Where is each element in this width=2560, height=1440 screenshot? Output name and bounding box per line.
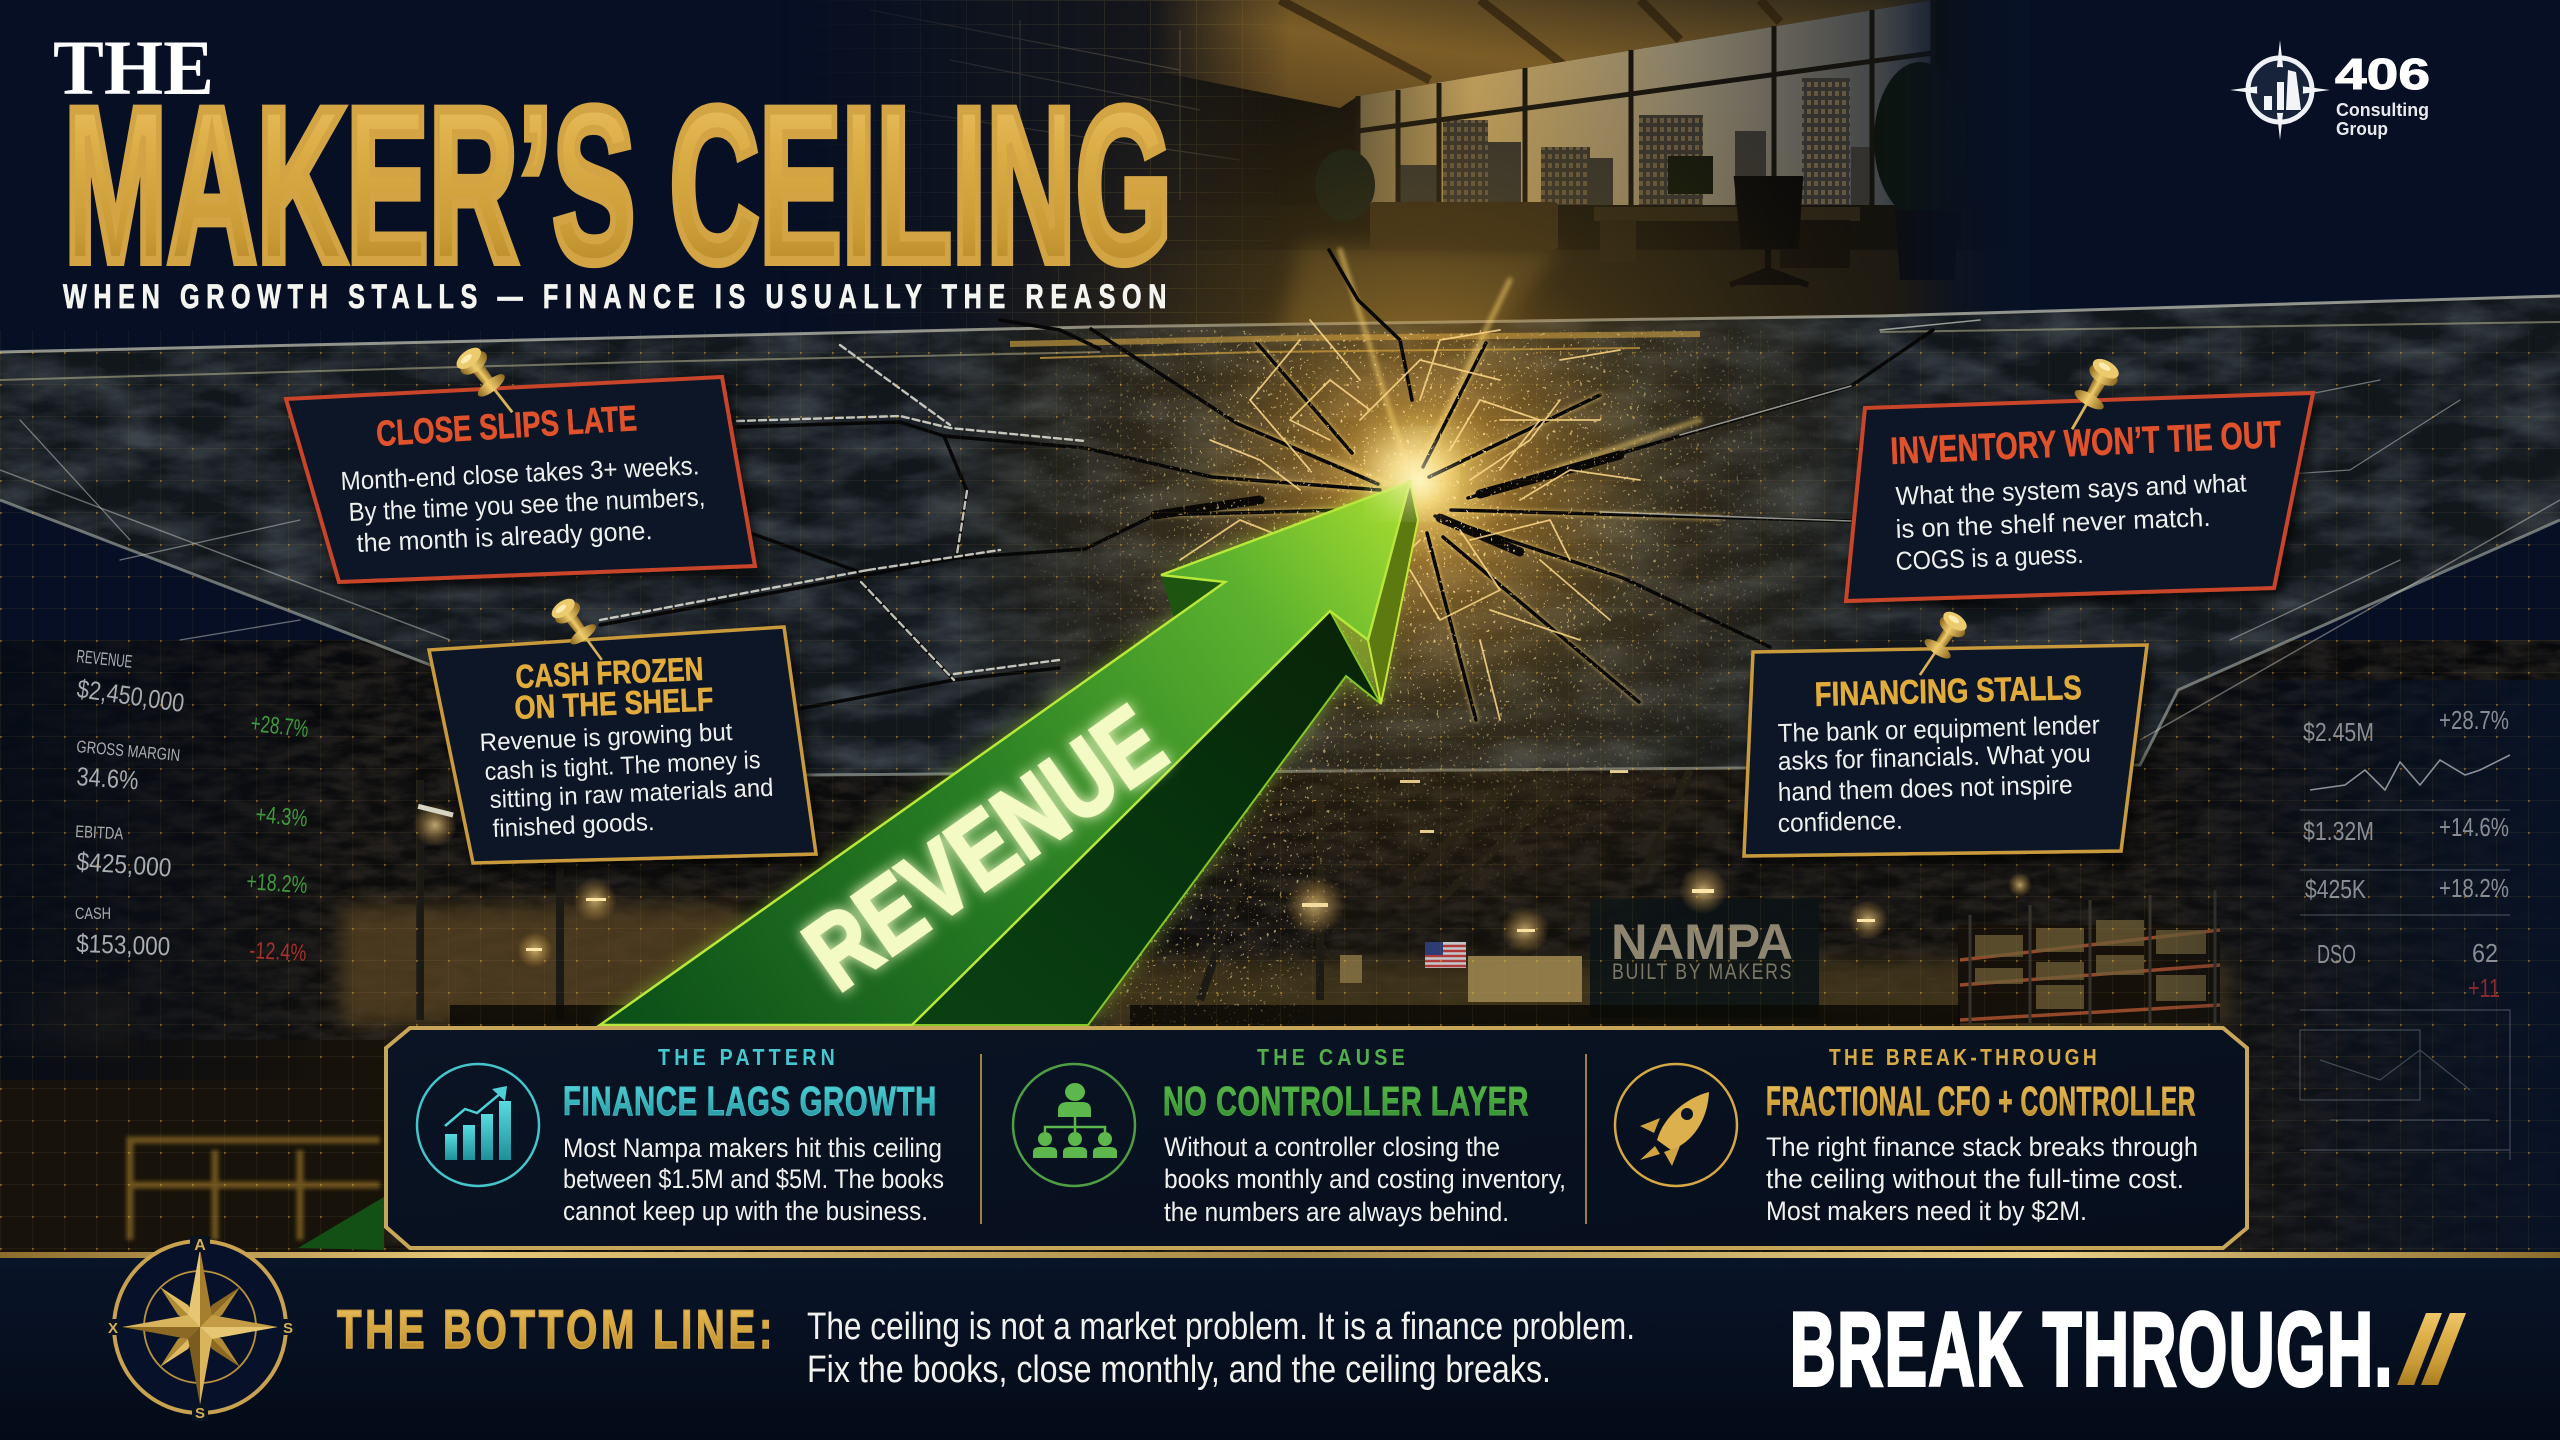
KPI overlay: right: 62 <box>2472 938 2498 968</box>
icon: pin, financing <box>1907 607 1973 684</box>
section: the pattern: THE PATTERN <box>658 1044 839 1070</box>
gold band rule <box>0 1252 2560 1258</box>
warehouse shelving <box>1958 890 2220 1023</box>
KPI overlay: left: $425,000 <box>76 846 172 883</box>
panel: three findings <box>386 1028 2247 1248</box>
KPI overlay: left: -12.4% <box>249 937 307 967</box>
card: financing stalls <box>1744 645 2147 856</box>
section: the break-through: THE BREAK-THROUGH <box>1829 1044 2100 1070</box>
card: cash frozen on the shelf: Revenue is growing but <box>479 718 733 757</box>
bottom line text <box>807 1306 1635 1391</box>
card: close slips late: the month is already gone. <box>356 515 653 558</box>
KPI overlay: right: DSO <box>2317 939 2356 969</box>
logo: 406 Consulting Group: 406 <box>2335 50 2430 99</box>
icon: compass rose: X <box>108 1320 118 1337</box>
card: cash frozen on the shelf: cash is tight. The money is <box>484 746 761 786</box>
KPI overlay: left: $153,000 <box>76 928 171 961</box>
card: close slips late: CLOSE SLIPS LATE <box>375 397 638 454</box>
KPI overlay: right: $1.32M <box>2303 816 2374 846</box>
icon: growth chart <box>417 1064 539 1186</box>
logo: 406 Consulting Group <box>2230 40 2430 140</box>
title: MAKER'S CEILING: MAKER’S CEILING <box>64 62 1172 308</box>
icon: compass rose: A <box>194 1237 206 1254</box>
bottom band <box>0 1255 2560 1440</box>
KPI overlay: left: +28.7% <box>249 710 310 743</box>
card: financing stalls: The bank or equipment lender <box>1777 710 2100 748</box>
title: THE: THE <box>53 24 214 111</box>
logo compass mark <box>2230 40 2330 140</box>
card: financing stalls: confidence. <box>1777 805 1903 838</box>
KPI overlay: left: +18.2% <box>246 868 308 899</box>
section: the pattern: Most Nampa makers hit this ceiling <box>563 1133 942 1163</box>
card: inventory won't tie out: What the system says and what <box>1895 468 2248 511</box>
right side dashboard panel <box>2150 680 2560 1255</box>
card: cash frozen on the shelf <box>429 627 816 863</box>
card: cash frozen on the shelf: CASH FROZEN <box>515 650 704 695</box>
card: financing stalls: hand them does not inspire <box>1777 769 2073 807</box>
impact flare <box>1382 444 1442 504</box>
KPI overlay: right: $425K <box>2305 874 2367 904</box>
office right fade <box>1880 0 2030 340</box>
bottom line text: The ceiling is not a market problem. It is a finance problem. <box>807 1306 1635 1348</box>
KPI overlay: right: +18.2% <box>2439 873 2509 903</box>
card: cash frozen on the shelf: ON THE SHELF <box>514 680 714 726</box>
left edge factory fade <box>0 640 360 1080</box>
icon: compass rose: S <box>195 1405 205 1422</box>
section: the break-through: The right finance stack breaks through <box>1766 1132 2198 1162</box>
KPI overlay: right: $2.45M <box>2303 717 2374 747</box>
section: the break-through: FRACTIONAL CFO + CONTROLLER <box>1766 1078 2196 1124</box>
section: the break-through: the ceiling without the full-time cost. <box>1766 1164 2184 1194</box>
icon: compass rose <box>106 1236 296 1422</box>
bottom line text: Fix the books, close monthly, and the ceiling breaks. <box>807 1349 1551 1391</box>
section: the cause: NO CONTROLLER LAYER <box>1163 1078 1529 1124</box>
sparkline <box>2310 755 2510 790</box>
the bottom line heading: THE BOTTOM LINE: <box>337 1298 776 1360</box>
card: inventory won't tie out <box>1846 393 2313 601</box>
section: the cause: Without a controller closing the <box>1164 1132 1500 1162</box>
nampa sign: BUILT BY MAKERS <box>1612 959 1793 984</box>
KPI overlay: left: REVENUE <box>76 646 133 672</box>
section: the break-through <box>1615 1044 2198 1226</box>
slashes <box>2397 1313 2466 1385</box>
slab glass edges <box>0 296 2560 775</box>
logo: 406 Consulting Group: Consulting <box>2336 100 2429 120</box>
icon: pin, inventory <box>2058 354 2125 438</box>
arrow label: REVENUE <box>785 684 1185 1013</box>
section: the pattern: cannot keep up with the business. <box>563 1196 928 1226</box>
KPI overlay: left: EBITDA <box>75 822 124 844</box>
section: the cause <box>1013 1044 1566 1227</box>
section: the pattern <box>417 1044 944 1226</box>
card: inventory won't tie out: COGS is a guess. <box>1895 539 2084 576</box>
arrow glow <box>600 482 1410 1025</box>
section: the cause: the numbers are always behind. <box>1164 1197 1509 1227</box>
divider lines <box>981 1054 1586 1224</box>
impact glow <box>900 0 1950 1000</box>
card: close slips late: Month-end close takes 3+ weeks. <box>340 450 700 496</box>
section: the cause: THE CAUSE <box>1257 1044 1409 1070</box>
glass cracks <box>20 250 2460 720</box>
section: the break-through: Most makers need it by $2M. <box>1766 1196 2087 1226</box>
background ledger grid <box>854 0 1270 330</box>
KPI overlay: left <box>75 646 310 967</box>
logo: 406 Consulting Group: Group <box>2336 119 2388 139</box>
revenue arrow <box>600 482 1418 1025</box>
icon: compass rose: S <box>283 1320 293 1337</box>
icon: pin, cash frozen <box>547 593 614 669</box>
factory hanging lights <box>413 770 2032 968</box>
card: financing stalls: FINANCING STALLS <box>1814 669 2082 714</box>
section: the cause: books monthly and costing inventory, <box>1164 1164 1566 1194</box>
icon: rocket <box>1615 1064 1737 1186</box>
icon: pin, close slips late <box>452 341 525 422</box>
section: the pattern: between $1.5M and $5M. The books <box>563 1164 944 1194</box>
KPI overlay: right <box>2300 705 2510 1160</box>
KPI overlay: right: +28.7% <box>2439 705 2509 735</box>
nampa sign: NAMPA <box>1611 914 1793 970</box>
sparks <box>1016 330 1824 1026</box>
section: the pattern: FINANCE LAGS GROWTH <box>563 1078 937 1124</box>
KPI overlay: left: +4.3% <box>254 801 309 833</box>
card: cash frozen on the shelf: sitting in raw materials and <box>489 774 774 814</box>
cracked glass ceiling slab <box>0 290 2560 780</box>
nampa sign <box>1590 899 1819 1018</box>
KPI overlay: right: +14.6% <box>2439 812 2509 842</box>
subtitle: WHEN GROWTH STALLS — FINANCE IS USUALLY THE REASON <box>63 278 1173 316</box>
card: financing stalls: asks for financials. What you <box>1777 738 2091 776</box>
american flag <box>1425 942 1466 968</box>
icon: org chart <box>1013 1064 1135 1186</box>
card: close slips late: By the time you see the numbers, <box>348 481 706 527</box>
factory scene <box>0 640 2560 1260</box>
KPI overlay: left: 34.6% <box>76 761 140 795</box>
KPI overlay: left: $2,450,000 <box>75 673 186 718</box>
card: inventory won't tie out: is on the shelf never match. <box>1895 502 2211 544</box>
card: inventory won't tie out: INVENTORY WON’T TIE OUT <box>1890 414 2282 473</box>
office scene <box>1162 0 1958 324</box>
KPI overlay: right: +11 <box>2468 973 2500 1003</box>
KPI overlay: left: GROSS MARGIN <box>76 737 181 765</box>
arrow tail below panel <box>298 1197 384 1250</box>
KPI overlay: left: CASH <box>75 904 111 923</box>
card: cash frozen on the shelf: finished goods. <box>492 808 655 843</box>
card: close slips late <box>286 377 755 582</box>
gold dot grid overlay <box>0 330 2560 1255</box>
